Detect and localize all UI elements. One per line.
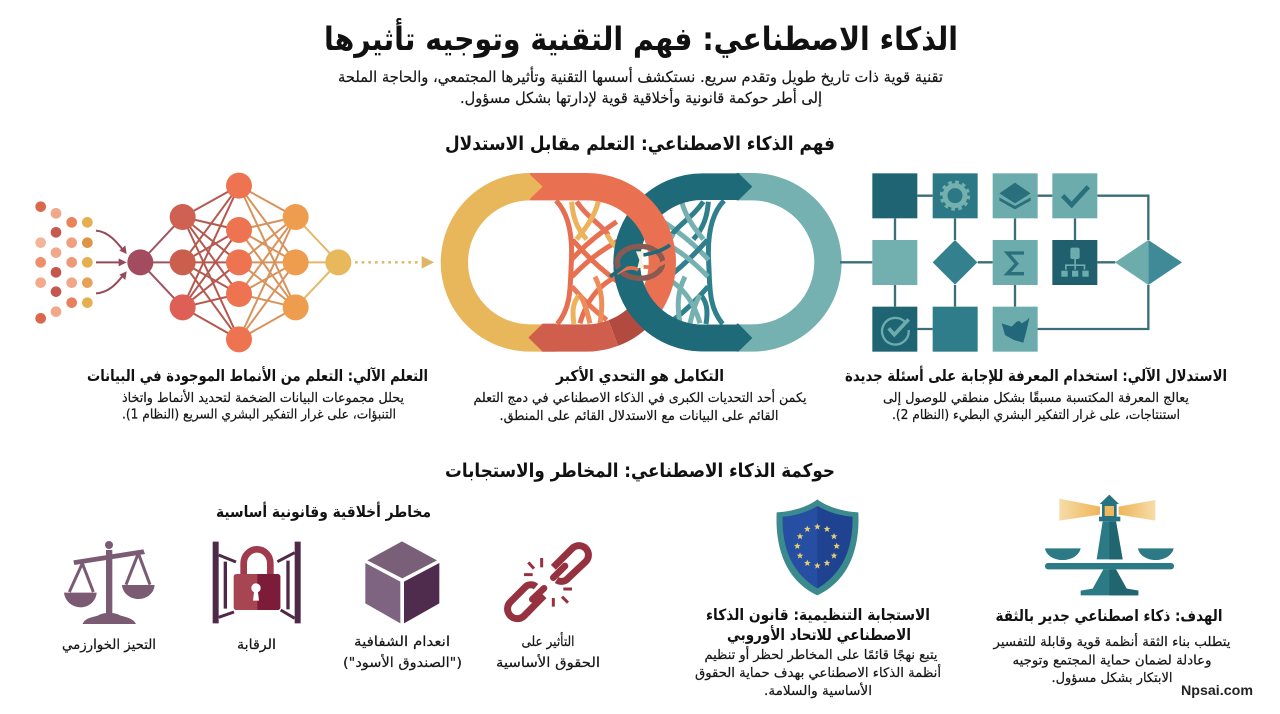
- column: EU AI Act text: يتبع نهجًا قائمًا على المخاطر لحظر أو تنظيم: [704, 646, 938, 663]
- chart: symbolic reasoning flow: [840, 173, 1182, 352]
- column: EU AI Act text: الاستجابة التنظيمية: قانون الذكاء: [706, 606, 930, 624]
- column: integration text: يكمن أحد التحديات الكبرى في الذكاء الاصطناعي في دمج التعلم: [474, 389, 807, 406]
- risk label: fundamental rights: التأثير على: [522, 632, 574, 650]
- EU stars: [794, 523, 840, 569]
- chart: infinity integration knot: [454, 173, 828, 352]
- column: trustworthy AI text: الهدف: ذكاء اصطناعي جدير بالثقة: [996, 607, 1222, 626]
- connectors: [840, 196, 1148, 329]
- risk label: opacity: [343, 634, 462, 671]
- subtitle text: إلى أطر حوكمة قانونية وأخلاقية قوية لإدارتها بشكل مسؤول.: [460, 88, 822, 107]
- icon: lighthouse scale: [1045, 495, 1174, 595]
- column: machine learning text: التنبؤات، على غرار التفكير البشري السريع (النظام 1).: [122, 408, 396, 422]
- icon: open box: [1002, 318, 1029, 343]
- column: EU AI Act text: أنظمة الذكاء الاصطناعي بهدف حماية الحقوق: [695, 664, 941, 681]
- data points: [35, 201, 93, 324]
- network nodes: [127, 173, 351, 352]
- column: EU AI Act text: الأساسية والسلامة.: [764, 682, 872, 699]
- icon: scales of justice: [64, 541, 155, 624]
- column: machine learning text: [87, 366, 428, 422]
- chart: neural network: [35, 173, 434, 352]
- row 2 blocks: [872, 240, 1182, 285]
- lattice left: [556, 201, 627, 324]
- risk label: censorship: الرقابة: [237, 637, 276, 653]
- subtitle text: تقنية قوية ذات تاريخ طويل وتقدم سريع. نستكشف أسسها التقنية وتأثيرها المجتمعي، والحاجة الملحة: [338, 66, 943, 87]
- column: reasoning text: [845, 366, 1227, 423]
- row 1 blocks: [872, 173, 1097, 218]
- dark teal bottom over red: [627, 262, 740, 338]
- red link: [528, 187, 662, 312]
- icon: censorship padlock: [216, 542, 298, 623]
- column: machine learning text: يحلل مجموعات البيانات الضخمة لتحديد الأنماط واتخاذ: [122, 389, 404, 406]
- title: الذكاء الاصطناعي: فهم التقنية وتوجيه تأثيرها: [324, 18, 958, 58]
- column: integration text: التكامل هو التحدي الأكبر: [555, 366, 724, 386]
- icon: check circle: [882, 318, 909, 345]
- column: machine learning text: التعلم الآلي: التعلم من الأنماط الموجودة في البيانات: [87, 366, 428, 386]
- subtitle text: [338, 66, 943, 107]
- risk label: fundamental rights: [496, 632, 600, 671]
- column: reasoning text: استنتاجات، على غرار التفكير البشري البطيء (النظام 2).: [892, 408, 1180, 423]
- column: reasoning text: يعالج المعرفة المكتسبة مسبقًا بشكل منطقي للوصول إلى: [883, 391, 1189, 406]
- icon: hierarchy: [1061, 248, 1089, 277]
- column: integration text: [474, 366, 807, 424]
- icon: layers: [999, 183, 1031, 209]
- dotted arrow: [355, 256, 434, 269]
- icon: check: [1063, 187, 1088, 205]
- section heading: learning vs reasoning: فهم الذكاء الاصطناعي: التعلم مقابل الاستدلال: [445, 133, 835, 155]
- column: trustworthy AI text: الابتكار بشكل مسؤول.: [1052, 671, 1172, 686]
- dark teal link: [627, 187, 750, 338]
- subheading: risks: مخاطر أخلاقية وقانونية أساسية: [216, 502, 431, 521]
- network edges: [140, 186, 338, 339]
- risk label: opacity: انعدام الشفافية: [354, 634, 450, 650]
- column: trustworthy AI text: [992, 607, 1231, 686]
- column: reasoning text: الاستدلال الآلي: استخدام المعرفة للإجابة على أسئلة جديدة: [845, 366, 1227, 386]
- risk label: algorithmic bias: التحيز الخوارزمي: [62, 637, 156, 653]
- light teal arc: [738, 187, 828, 338]
- column: EU AI Act text: [695, 606, 941, 699]
- lattice right: [653, 201, 724, 324]
- arrows into network: [96, 231, 127, 293]
- column: trustworthy AI text: يتطلب بناء الثقة أنظمة قوية وقابلة للتفسير: [992, 633, 1231, 650]
- risk label: opacity: ("الصندوق الأسود"): [343, 654, 462, 671]
- central knot: [610, 245, 670, 278]
- column: trustworthy AI text: وعادلة لضمان حماية المجتمع وتوجيه: [1012, 654, 1212, 668]
- icon: gear: [941, 182, 969, 209]
- row 3 blocks: [872, 307, 1038, 352]
- icon: broken chain: [508, 546, 588, 619]
- section heading: governance: حوكمة الذكاء الاصطناعي: المخاطر والاستجابات: [445, 460, 835, 482]
- red arrowhead at bottom: [528, 324, 557, 352]
- risk label: fundamental rights: الحقوق الأساسية: [496, 654, 600, 671]
- column: integration text: القائم على البيانات مع الاستدلال القائم على المنطق.: [500, 409, 778, 424]
- icon: sigma: [1007, 253, 1024, 274]
- icon: black box cube: [365, 541, 439, 623]
- watermark: Npsai.com: [1181, 682, 1253, 698]
- yellow arc: [454, 187, 542, 338]
- icon: EU shield: [776, 499, 859, 595]
- column: EU AI Act text: الاصطناعي للاتحاد الأوروبي: [727, 625, 911, 645]
